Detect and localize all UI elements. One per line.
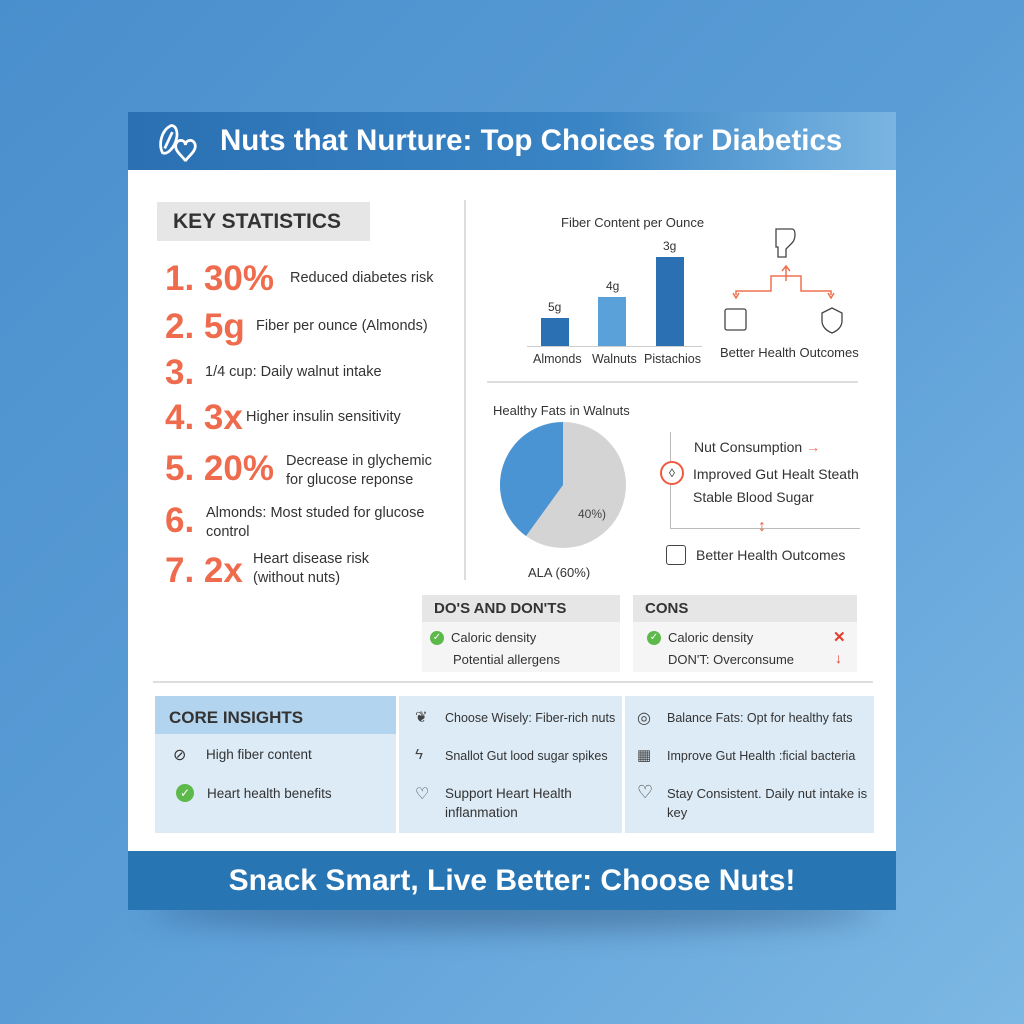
stat 3: 1/4 cup: Daily walnut intake bbox=[205, 364, 382, 380]
stat 3: 3. bbox=[165, 353, 194, 392]
stat 2: 2. 5g bbox=[165, 307, 245, 346]
panel: insights column 3: key bbox=[667, 805, 687, 820]
panel: dos and donts: Potential allergens bbox=[453, 652, 560, 667]
pie chart: healthy fats in walnuts bbox=[493, 403, 630, 580]
flow: nut consumption: Nut Consumption → bbox=[694, 439, 820, 455]
bar chart: fiber content: 3g bbox=[663, 239, 676, 253]
panel: insights column 2: inflanmation bbox=[445, 805, 518, 820]
panel: insights column 3: Stay Consistent. Daily nut intake is bbox=[667, 786, 867, 801]
bar chart: fiber content: 4g bbox=[606, 279, 619, 293]
divider bbox=[153, 681, 873, 683]
bar chart: fiber content: Walnuts bbox=[592, 352, 637, 366]
pie chart: healthy fats in walnuts: Healthy Fats in Walnuts bbox=[493, 403, 630, 418]
stat 7: 7. 2x bbox=[165, 551, 243, 590]
panel: insights column 3: ♡ bbox=[637, 782, 653, 802]
diagram: better health outcomes tree: Better Health Outcomes bbox=[720, 345, 859, 360]
bar chart: fiber content: Pistachios bbox=[644, 352, 701, 366]
stat 7: (without nuts) bbox=[253, 570, 340, 586]
panel: dos and donts: Caloric density bbox=[451, 630, 536, 645]
stat 6 bbox=[165, 501, 424, 540]
stat 2 bbox=[165, 307, 428, 346]
icon: box bbox=[666, 545, 686, 565]
divider bbox=[487, 381, 858, 383]
panel: insights column 2 bbox=[399, 696, 622, 833]
stat 5 bbox=[165, 449, 432, 488]
panel: insights column 2: Choose Wisely: Fiber-rich nuts bbox=[445, 711, 615, 725]
flow: nut consumption: Better Health Outcomes bbox=[696, 547, 845, 563]
stat 4 bbox=[165, 398, 401, 437]
panel: insights column 2: ϟ bbox=[415, 746, 423, 763]
stat 5: for glucose reponse bbox=[286, 472, 413, 488]
panel: insights column 2: Snallot Gut lood sugar spikes bbox=[445, 749, 608, 763]
panel: cons: ↓ bbox=[835, 650, 842, 666]
panel: cons bbox=[633, 595, 857, 672]
bar chart: fiber content: 5g bbox=[548, 300, 561, 314]
stat 1 bbox=[165, 259, 434, 298]
panel: key statistics bbox=[157, 202, 434, 590]
panel: insights column 3: Balance Fats: Opt for healthy fats bbox=[667, 711, 853, 725]
stat 1: Reduced diabetes risk bbox=[290, 270, 433, 286]
panel: insights column 3: Improve Gut Health :ficial bacteria bbox=[667, 749, 855, 763]
bar chart: fiber content: Almonds bbox=[533, 352, 582, 366]
pie chart: healthy fats in walnuts: 40%) bbox=[578, 507, 606, 521]
panel: core insights: CORE INSIGHTS bbox=[169, 708, 303, 727]
panel: core insights: Heart health benefits bbox=[207, 786, 332, 801]
pie chart: healthy fats in walnuts: ALA (60%) bbox=[528, 565, 590, 580]
panel: insights column 3 bbox=[625, 696, 874, 833]
bar chart: fiber content bbox=[527, 215, 704, 366]
flow: nut consumption: ↕ bbox=[758, 518, 766, 535]
panel: insights column 3: ▦ bbox=[637, 747, 651, 764]
panel: insights column 2: ❦ bbox=[415, 709, 428, 726]
stat 7: Heart disease risk bbox=[253, 551, 369, 567]
panel: core insights: High fiber content bbox=[206, 747, 312, 762]
footer banner: Snack Smart, Live Better: Choose Nuts! bbox=[229, 864, 795, 897]
flow: nut consumption bbox=[660, 432, 860, 565]
card bbox=[128, 112, 896, 910]
panel: core insights: ✓ bbox=[180, 786, 190, 800]
stat 7 bbox=[165, 551, 369, 590]
heading: key statistics: KEY STATISTICS bbox=[173, 210, 341, 233]
panel: insights column 2: ♡ bbox=[415, 786, 429, 803]
vertical divider bbox=[464, 200, 466, 580]
panel: core insights: ⊘ bbox=[173, 747, 186, 764]
stat 6: control bbox=[206, 524, 250, 540]
stat 1: 1. 30% bbox=[165, 259, 274, 298]
card shadow bbox=[150, 890, 874, 930]
stat 4: Higher insulin sensitivity bbox=[246, 409, 401, 425]
icon: drop bbox=[660, 461, 684, 485]
stat 6: 6. bbox=[165, 501, 194, 540]
heading: key statistics bbox=[157, 202, 370, 241]
panel: cons: DON'T: Overconsume bbox=[668, 652, 794, 667]
stat 4: 4. 3x bbox=[165, 398, 243, 437]
panel: dos and donts: ✓ bbox=[433, 632, 441, 643]
panel: insights column 2: Support Heart Health bbox=[445, 786, 572, 801]
panel: core insights bbox=[155, 696, 396, 833]
title: Nuts that Nurture: Top Choices for Diabetics bbox=[220, 124, 842, 157]
stat 3 bbox=[165, 353, 382, 392]
panel: insights column 3: ◎ bbox=[637, 710, 651, 727]
icon: drop: ◊ bbox=[669, 466, 675, 480]
flow: nut consumption: Improved Gut Healt Steath bbox=[693, 466, 859, 482]
diagram: better health outcomes tree bbox=[720, 228, 859, 360]
header bbox=[128, 112, 896, 170]
panel: dos and donts bbox=[422, 595, 620, 672]
flow: nut consumption: Stable Blood Sugar bbox=[693, 489, 814, 505]
stat 6: Almonds: Most studed for glucose bbox=[206, 505, 424, 521]
footer banner bbox=[128, 851, 896, 910]
panel: cons: Caloric density bbox=[668, 630, 753, 645]
panel: cons: CONS bbox=[645, 600, 688, 617]
icon: almond heart bbox=[159, 124, 197, 162]
stat 5: 5. 20% bbox=[165, 449, 274, 488]
panel: dos and donts: DO'S AND DON'TS bbox=[434, 600, 566, 617]
panel: cons: ✓ bbox=[650, 632, 658, 643]
panel: cons: ✕ bbox=[833, 629, 846, 646]
bar chart: fiber content: Fiber Content per Ounce bbox=[561, 215, 704, 230]
stat 2: Fiber per ounce (Almonds) bbox=[256, 318, 428, 334]
stat 5: Decrease in glychemic bbox=[286, 453, 432, 469]
